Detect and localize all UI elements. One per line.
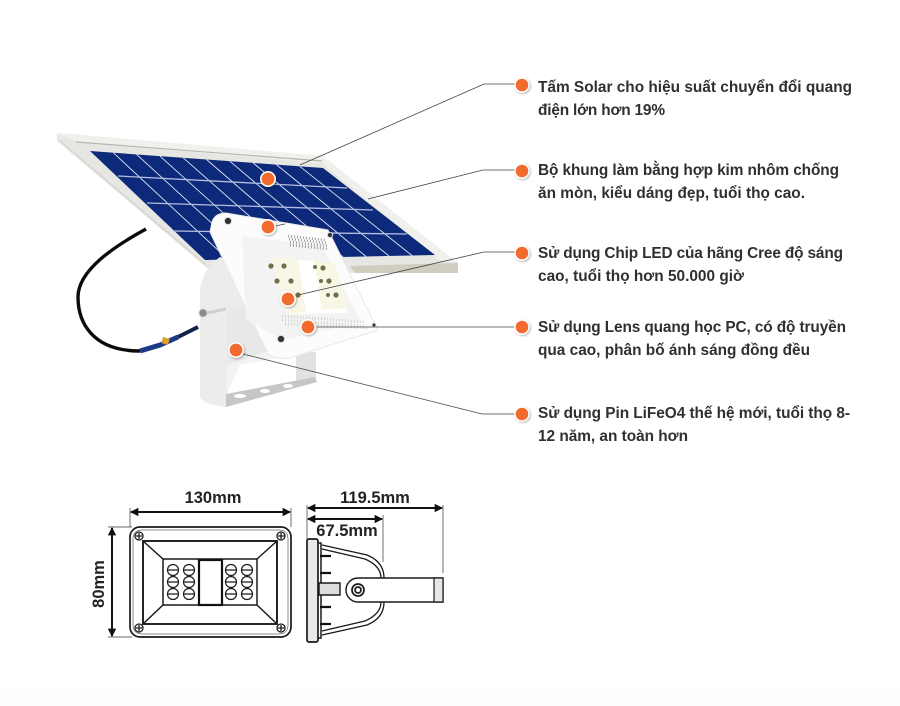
callout 5: battery: 12 năm, an toàn hơn <box>538 428 688 445</box>
solar panel <box>57 133 458 273</box>
dimension: height 80mm: 80mm <box>90 560 108 608</box>
callout 2: frame: Bộ khung làm bằng hợp kim nhôm chống <box>538 161 839 179</box>
dimension: depth 67.5mm <box>308 515 383 562</box>
mounting bracket <box>199 257 317 407</box>
cable <box>78 229 198 351</box>
callout 3: LED chip: cao, tuổi thọ hơn 50.000 giờ <box>538 268 744 285</box>
callout 1: solar panel: điện lớn hơn 19% <box>538 102 665 119</box>
callout 3: LED chip <box>515 245 843 285</box>
leader lines <box>243 84 515 414</box>
callout 4: lens <box>515 319 846 359</box>
front view lamp <box>130 527 291 637</box>
dimension: height 80mm <box>90 527 132 637</box>
callout 2: frame: ăn mòn, kiểu dáng đẹp, tuổi thọ cao. <box>538 185 805 202</box>
callout 1: solar panel: Tấm Solar cho hiệu suất chuyển đổi quang <box>538 79 852 96</box>
callout 3: LED chip: Sử dụng Chip LED của hãng Cree độ sáng <box>538 245 843 262</box>
callout 4: lens: qua cao, phân bố ánh sáng đồng đều <box>538 342 810 359</box>
dimension: width 130mm <box>130 489 291 527</box>
lamp body <box>210 213 378 358</box>
dimension: depth 67.5mm: 67.5mm <box>316 522 378 540</box>
front dimension drawing <box>90 489 291 637</box>
callout 1: solar panel <box>515 78 852 119</box>
callout 4: lens: Sử dụng Lens quang học PC, có độ truyền <box>538 319 846 336</box>
callout 2: frame <box>515 161 839 202</box>
dimension: depth 119.5mm: 119.5mm <box>340 489 410 507</box>
callout 5: battery <box>515 405 850 445</box>
side dimension drawing <box>307 489 443 642</box>
product illustration: solar light <box>57 133 458 407</box>
dimension: depth 119.5mm <box>307 489 443 573</box>
side view lamp <box>307 539 443 642</box>
markers on product <box>229 172 315 357</box>
dimension: width 130mm: 130mm <box>185 489 241 507</box>
callout 5: battery: Sử dụng Pin LiFeO4 thế hệ mới, tuổi thọ 8- <box>538 405 850 422</box>
